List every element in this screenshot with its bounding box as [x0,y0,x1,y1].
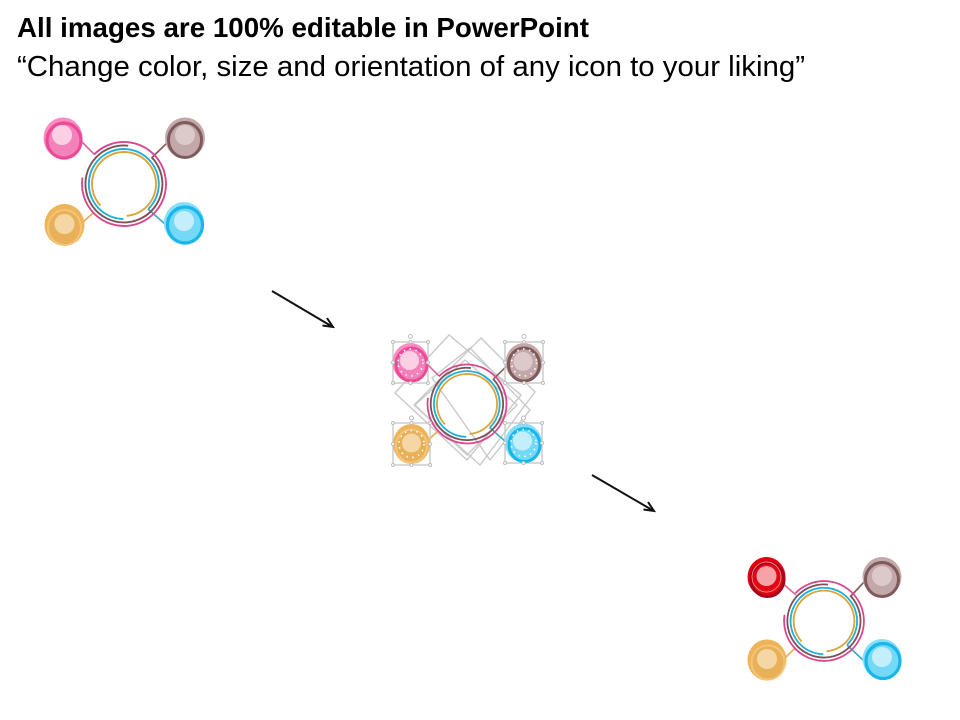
subtitle: “Change color, size and orientation of any icon to your liking” [17,51,805,83]
concentric arcs [82,142,166,226]
node: brown with handles [504,334,544,384]
node: red [748,557,786,597]
node: gold [748,640,786,680]
connector lines [82,142,167,224]
diagram: editable points [392,334,544,466]
arrow 1 [272,291,333,327]
connector lines [781,581,865,661]
arrow 2 [592,475,654,511]
node: blue [862,639,902,679]
node: brown [165,118,205,158]
node: pink with handles [392,334,430,384]
concentric arcs [784,581,864,661]
title: All images are 100% editable in PowerPoint [17,12,589,43]
node: blue with handles [504,416,544,464]
diagram core [420,357,507,443]
node: gold with handles [392,416,432,466]
node: pink [44,118,82,158]
rotated bounding boxes [395,335,535,465]
diagram: original [44,118,205,246]
node: blue [164,202,204,244]
node: gold [44,204,84,246]
node: brown [862,557,902,597]
diagram: recoloured [748,557,902,680]
